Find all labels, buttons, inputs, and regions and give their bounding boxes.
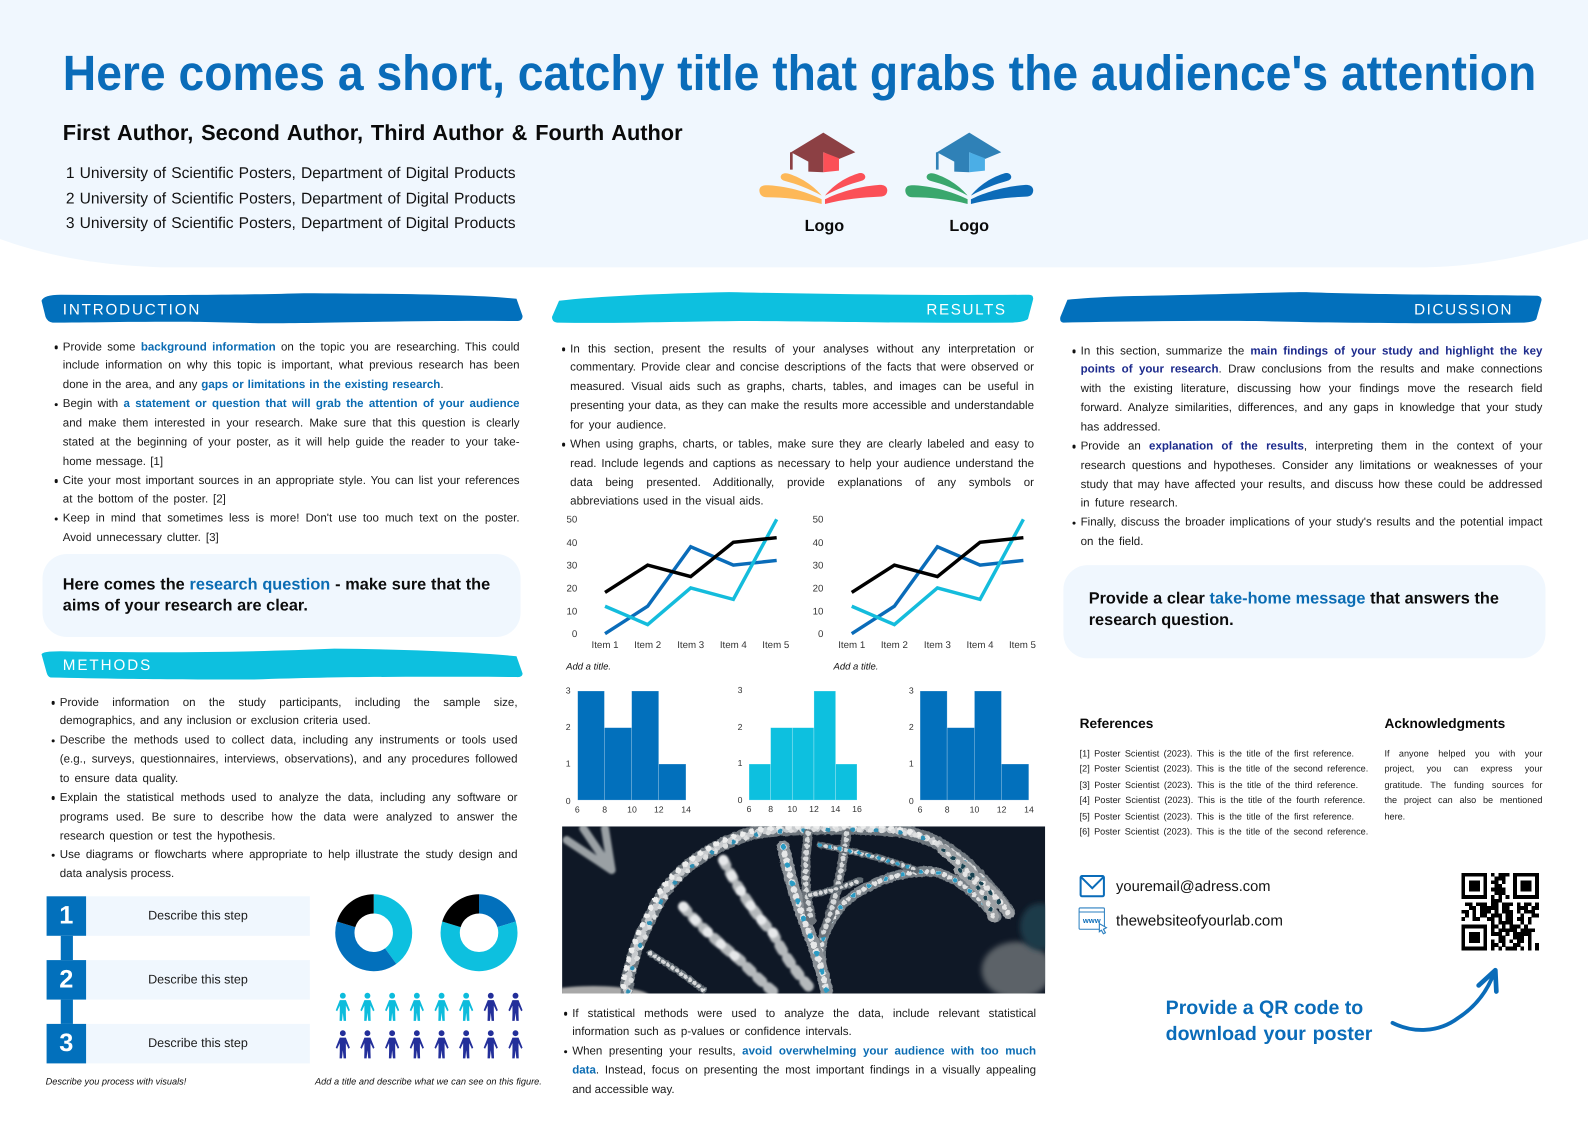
histogram 2: 14 <box>831 804 841 814</box>
text: methods bullets: programs used. Be sure to describe how the data were analyzed to answer the <box>60 811 518 823</box>
text: introduction bullets: Avoid unnecessary clutter. [3] <box>63 532 219 544</box>
line chart 1 <box>566 514 789 651</box>
QR prompt text: download your poster <box>1166 1024 1372 1045</box>
callout: research question <box>43 554 521 637</box>
line chart 2: 20 <box>813 583 823 594</box>
histogram 1: 12 <box>654 805 664 815</box>
text: methods bullets: Provide information on the study participants, including the sample size, <box>60 696 518 709</box>
callout text <box>1089 589 1499 629</box>
text: results bullets: presenting your data, as they can make the results more accessible and understandable <box>570 400 1034 412</box>
text: results bullets continued: and accessible way. <box>572 1084 675 1096</box>
step 2 label <box>86 960 310 1000</box>
logo: blue graduation cap and book: Logo <box>949 218 989 235</box>
panel: discussion <box>1060 292 1546 1045</box>
text: results bullets: measured. Visual aids such as graphs, charts, tables, and images can be useful in <box>570 381 1034 393</box>
callout: take-home message <box>1063 565 1545 658</box>
references list: [5] Poster Scientist (2023). This is the title of the first reference. <box>1080 811 1354 821</box>
text: introduction bullets: and make them interested in your research. Make sure that this question is clearly <box>63 417 520 429</box>
histogram 3: 12 <box>997 805 1007 815</box>
histogram 1: 0 <box>566 796 571 806</box>
caption: chart 1: Add a title. <box>566 660 611 671</box>
acknowledgments text: here. <box>1384 811 1405 821</box>
line chart 2: 0 <box>818 629 823 640</box>
text: introduction bullets: stated at the beginning of your poster, as it will help guide the reader to your take- <box>63 436 520 448</box>
line chart 2: Item 4 <box>967 640 994 651</box>
image: DNA helix <box>562 826 1046 994</box>
text: discussion bullets: points of your research. Draw conclusions from the results and make connections <box>1081 364 1542 376</box>
text: introduction bullets: Keep in mind that sometimes less is more! Don't use too much text on the poster. <box>63 513 520 525</box>
histogram 3: 8 <box>945 805 950 815</box>
histogram 2: 10 <box>787 804 797 814</box>
text: results bullets: In this section, present the results of your analyses without any interpretation or <box>570 343 1034 355</box>
heading: results <box>552 292 1034 323</box>
heading: results: RESULTS <box>926 301 1007 319</box>
histogram 2: 6 <box>747 804 752 814</box>
step 3 number: 3 <box>59 1029 73 1057</box>
line chart 1: Item 1 <box>592 640 619 651</box>
text: results bullets: When using graphs, charts, or tables, make sure they are clearly labeled and easy to <box>570 438 1034 450</box>
histogram 1: 1 <box>566 759 571 769</box>
heading: discussion <box>1060 292 1542 324</box>
line chart 1: 0 <box>572 629 577 640</box>
line chart 2: 10 <box>813 607 823 618</box>
arrow to QR code <box>1390 968 1499 1032</box>
histogram 2 <box>738 685 862 814</box>
text: discussion bullets: study that may have affected your results, and discuss how these could be addressed <box>1081 479 1542 491</box>
text: methods bullets: Use diagrams or flowcharts where appropriate to help illustrate the study design and <box>60 849 518 861</box>
affiliations: 3 University of Scientific Posters, Department of Digital Products <box>66 215 515 232</box>
text: results bullets: data being presented. Additionally, provide explanations of any symbols or <box>570 477 1034 489</box>
QR prompt text: Provide a QR code to <box>1166 998 1363 1019</box>
caption: chart 2: Add a title. <box>834 660 878 671</box>
histogram 1: 8 <box>602 805 607 815</box>
text: results bullets continued: When presenting your results, avoid overwhelming your audience with too much <box>572 1045 1036 1058</box>
QR code <box>1462 873 1539 950</box>
line chart 1: Item 4 <box>720 640 748 651</box>
line chart 1: 40 <box>566 538 577 549</box>
acknowledgments heading: Acknowledgments <box>1384 716 1505 731</box>
text: introduction bullets: home message. [1] <box>63 455 163 468</box>
text: results bullets continued: information such as p-values or confidence intervals. <box>572 1026 852 1039</box>
heading: discussion: DICUSSION <box>1414 301 1513 319</box>
histogram 1: 3 <box>566 686 571 696</box>
histogram 3: 14 <box>1024 805 1034 815</box>
callout text <box>63 575 490 615</box>
authors: First Author, Second Author, Third Author & Fourth Author <box>63 121 683 145</box>
affiliations: 1 University of Scientific Posters, Department of Digital Products <box>66 165 515 182</box>
histogram 2: 16 <box>852 804 862 814</box>
callout text: Here comes the research question - make sure that the <box>63 575 490 593</box>
histogram 3: 0 <box>909 796 914 806</box>
histogram 2: 8 <box>768 804 773 814</box>
references list: [4] Poster Scientist (2023). This is the title of the fourth reference. <box>1080 795 1365 805</box>
logo: blue graduation cap and book <box>905 132 1034 235</box>
acknowledgments <box>1384 716 1542 821</box>
text: discussion bullets: with the existing literature, discussing how your findings move the research field <box>1081 383 1542 395</box>
donut chart 1 <box>335 894 412 972</box>
heading: introduction <box>42 293 523 324</box>
connector 2 <box>61 1000 73 1024</box>
histogram 3 <box>909 686 1034 815</box>
process flow: three steps <box>46 896 310 1064</box>
text: discussion bullets: Finally, discuss the broader implications of your study's results and the potential impact <box>1081 517 1542 529</box>
histogram 3: 3 <box>909 686 914 696</box>
acknowledgments text: the project can also be mentioned <box>1384 795 1542 805</box>
heading: introduction: INTRODUCTION <box>63 301 201 319</box>
histogram 2: 1 <box>738 758 743 768</box>
acknowledgments text <box>1384 748 1542 821</box>
caption: process: Describe you process with visuals! <box>46 1077 186 1087</box>
histogram 2: 2 <box>738 722 743 732</box>
website address: thewebsiteofyourlab.com <box>1116 914 1283 930</box>
pictogram: people <box>336 992 522 1058</box>
line chart 2: 40 <box>813 538 823 549</box>
line chart 2: Item 3 <box>924 640 951 651</box>
affiliations <box>66 165 515 232</box>
histogram 3: 1 <box>909 759 914 769</box>
histogram 1 <box>566 686 691 815</box>
step 1 label <box>86 896 310 936</box>
connector 1 <box>61 936 73 960</box>
text: methods bullets: (e.g., surveys, questionnaires, interviews, observations), and any procedures followed <box>60 754 518 766</box>
text: results bullets continued: data. Instead, focus on presenting the most important findings in a visually appealing <box>572 1065 1036 1077</box>
references list <box>1080 748 1368 836</box>
text: introduction bullets: include information on why this topic is important, what previous research has been <box>63 360 520 372</box>
caption: figure: Add a title and describe what we can see on this figure. <box>315 1077 542 1087</box>
histogram 1: 2 <box>566 722 571 732</box>
heading: methods: METHODS <box>63 657 152 674</box>
step 3 label: Describe this step <box>148 1036 248 1050</box>
text: methods bullets: Describe the methods used to collect data, including any instruments or tools used <box>60 735 518 747</box>
icon: email <box>1080 875 1105 898</box>
affiliations: 2 University of Scientific Posters, Department of Digital Products <box>66 190 515 207</box>
panel: header <box>0 0 1588 268</box>
heading: methods <box>42 648 523 680</box>
text: results bullets: abbreviations used in the visual aids. <box>570 496 764 508</box>
callout text: Provide a clear take-home message that answers the <box>1089 589 1499 608</box>
histogram 1: 14 <box>681 805 691 815</box>
references list: [6] Poster Scientist (2023). This is the title of the second reference. <box>1080 826 1368 836</box>
references <box>1080 716 1368 836</box>
line chart 2: Item 5 <box>1009 640 1036 651</box>
text: results bullets: commentary. Provide clear and concise descriptions of the facts that were observed or <box>570 362 1034 374</box>
line chart 1: Item 3 <box>677 640 704 651</box>
text: discussion bullets: on the field. <box>1081 536 1143 548</box>
callout text: aims of your research are clear. <box>63 597 308 615</box>
histogram 3: 2 <box>909 722 914 732</box>
text: results bullets <box>562 343 1034 508</box>
donut chart 2 <box>440 894 518 972</box>
references heading: References <box>1080 716 1153 731</box>
references list: [2] Poster Scientist (2023). This is the title of the second reference. <box>1080 764 1368 774</box>
step 1 number <box>47 896 86 936</box>
panel: introduction and methods <box>42 293 542 1087</box>
text: introduction bullets: Begin with a statement or question that will grab the attention of your audience <box>63 398 520 410</box>
acknowledgments text: project, you can express your <box>1384 764 1542 774</box>
text: discussion bullets <box>1072 345 1542 548</box>
panel: results <box>552 292 1046 1096</box>
line chart 2: Item 2 <box>881 640 908 651</box>
QR prompt text <box>1166 998 1372 1045</box>
text: results bullets: for your audience. <box>570 419 666 431</box>
email address: youremail@adress.com <box>1116 879 1271 895</box>
histogram 1: 6 <box>575 805 580 815</box>
text: introduction bullets: at the bottom of the poster. [2] <box>63 494 226 506</box>
references list: [3] Poster Scientist (2023). This is the title of the third reference. <box>1080 780 1358 790</box>
icon: website: www <box>1082 916 1101 925</box>
references list: [1] Poster Scientist (2023). This is the title of the first reference. <box>1080 748 1354 759</box>
line chart 2: 50 <box>813 514 823 526</box>
text: results bullets continued: If statistical methods were used to analyze the data, include relevant statistical <box>572 1007 1036 1019</box>
text: methods bullets: demographics, and any inclusion or exclusion criteria used. <box>60 715 371 728</box>
line chart 2: Item 1 <box>838 640 865 651</box>
text: methods bullets: research question or test the hypothesis. <box>60 830 275 842</box>
text: introduction bullets <box>54 341 520 544</box>
icon: website <box>1078 907 1108 934</box>
text: discussion bullets: Provide an explanation of the results, interpreting them in the context of your <box>1081 440 1542 453</box>
text: methods bullets <box>52 696 518 880</box>
text: discussion bullets: forward. Analyze similarities, differences, and any gaps in knowledge that your study <box>1081 402 1542 414</box>
histogram 2: 0 <box>738 795 743 805</box>
text: discussion bullets: research questions and hypotheses. Consider any limitations or weaknesses of your <box>1081 459 1542 472</box>
step 2 label: Describe this step <box>148 972 248 986</box>
step 3 label <box>86 1024 310 1063</box>
step 1 number: 1 <box>59 901 73 930</box>
text: results bullets: read. Include legends and captions as necessary to help your audience understand the <box>570 457 1034 470</box>
histogram 3: 6 <box>918 805 923 815</box>
step 2 number <box>47 960 86 1000</box>
text: methods bullets: to ensure data quality. <box>60 773 178 785</box>
text: discussion bullets: has addressed. <box>1081 421 1161 433</box>
line chart 2: 30 <box>813 561 823 572</box>
text: introduction bullets: done in the area, and any gaps or limitations in the existing research. <box>63 379 444 391</box>
acknowledgments text: gratitude. The funding sources for <box>1384 780 1542 790</box>
line chart 1: 50 <box>566 514 577 526</box>
step 3 number <box>47 1024 86 1063</box>
text: discussion bullets: In this section, summarize the main findings of your study and highlight the key <box>1081 345 1542 357</box>
step 1 label: Describe this step <box>148 908 248 923</box>
acknowledgments text: If anyone helped you with your <box>1384 748 1542 759</box>
line chart 1: Item 2 <box>634 640 661 651</box>
line chart 2 <box>812 514 1036 651</box>
line chart 1: 30 <box>566 561 577 572</box>
line chart 1: 10 <box>566 607 577 618</box>
header background <box>0 0 1588 268</box>
text: introduction bullets: Cite your most important sources in an appropriate style. You can list your references <box>63 474 520 487</box>
logo: red graduation cap and book: Logo <box>805 218 844 235</box>
title: Here comes a short, catchy title that grabs the audience's attention <box>63 47 1536 101</box>
histogram 2: 3 <box>738 685 743 695</box>
text: introduction bullets: Provide some background information on the topic you are researching. This could <box>63 341 520 353</box>
logo: red graduation cap and book <box>759 132 888 235</box>
text: results bullets continued <box>564 1007 1036 1096</box>
line chart 1: 20 <box>566 583 577 594</box>
text: methods bullets: data analysis process. <box>60 868 174 880</box>
step 2 number: 2 <box>59 965 73 994</box>
histogram 2: 12 <box>809 804 819 814</box>
text: methods bullets: Explain the statistical methods used to analyze the data, including any software or <box>60 792 518 804</box>
text: discussion bullets: in future research. <box>1081 498 1178 510</box>
line chart 1: Item 5 <box>762 640 789 651</box>
histogram 1: 10 <box>627 805 637 815</box>
histogram 3: 10 <box>970 805 980 815</box>
callout text: research question. <box>1089 611 1234 629</box>
